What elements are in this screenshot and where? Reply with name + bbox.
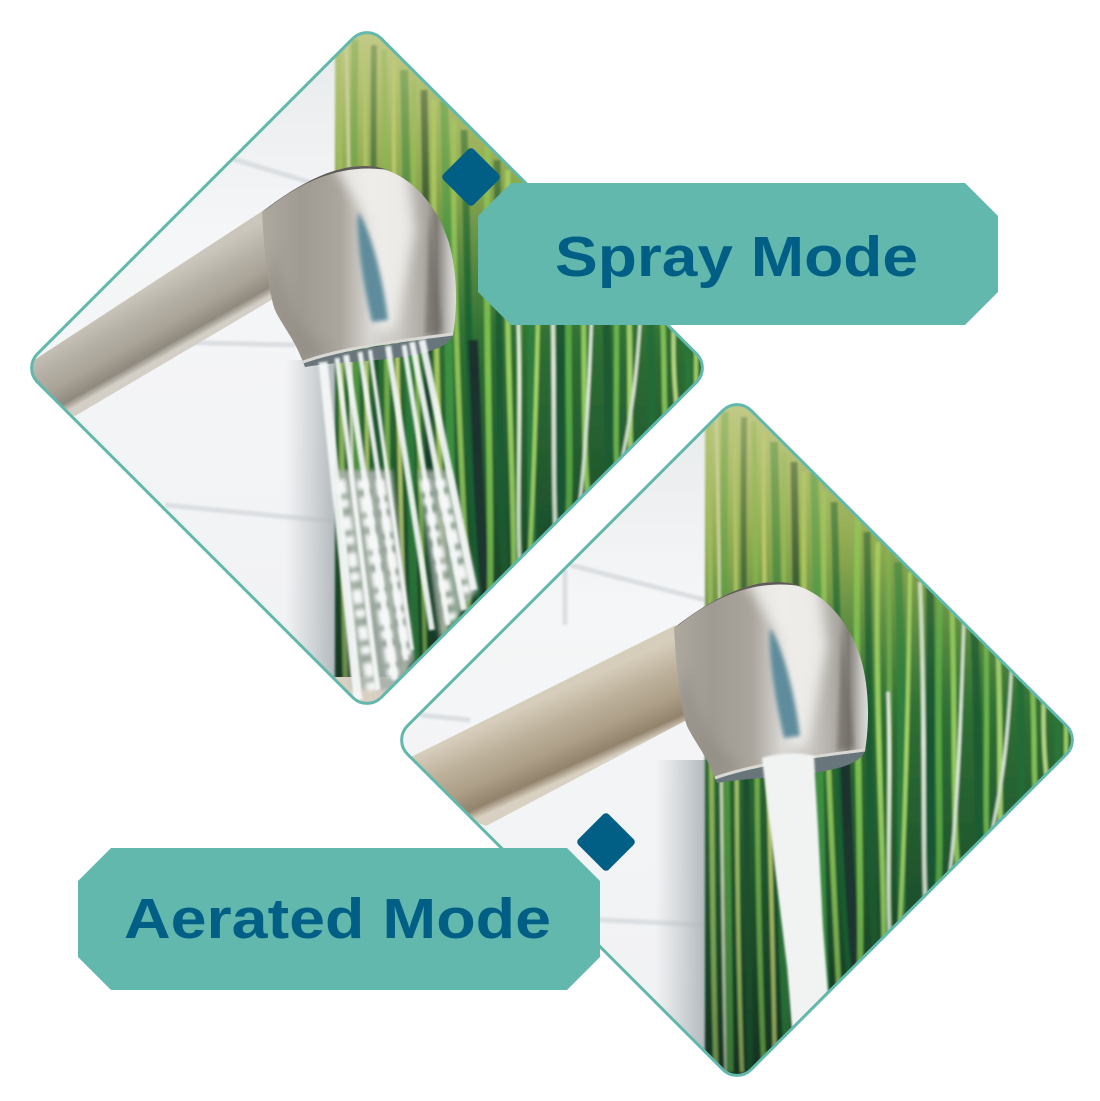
faucet head	[667, 576, 872, 786]
label: aerated mode	[78, 848, 600, 990]
tiled wall background	[403, 430, 706, 1022]
faucet arm	[25, 210, 285, 416]
panel: spray mode photo	[20, 20, 715, 720]
faucet head	[255, 160, 460, 370]
water stream	[762, 754, 828, 1030]
tiled wall background	[36, 58, 336, 650]
grass background	[333, 34, 701, 682]
panel border	[393, 396, 1081, 1084]
label: spray mode	[478, 183, 998, 325]
wall base	[335, 677, 395, 702]
faucet arm	[412, 625, 686, 826]
grass background	[705, 392, 1085, 1092]
icon: spray mode diamond	[441, 147, 501, 207]
panel: aerated mode photo	[390, 390, 1085, 1092]
label: spray mode: Spray Mode	[555, 225, 918, 289]
panel border	[23, 24, 711, 712]
icon: aerated mode diamond	[576, 812, 636, 872]
spray streams	[337, 470, 478, 690]
label: aerated mode: Aerated Mode	[124, 887, 551, 951]
